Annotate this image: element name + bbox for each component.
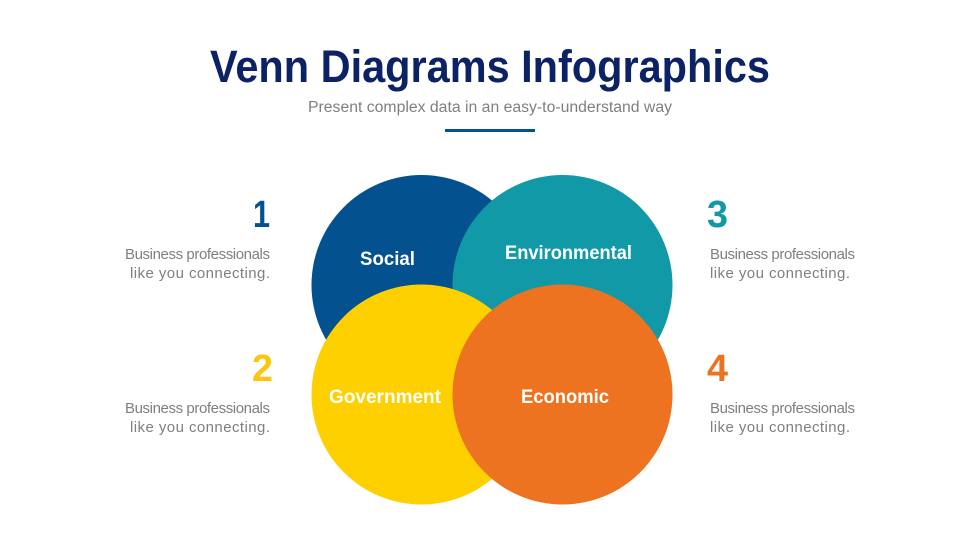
item 2: government	[125, 348, 273, 436]
label: economic: Economic	[521, 387, 609, 408]
item 4: economic	[707, 348, 855, 436]
description 3	[710, 246, 855, 282]
description 1	[125, 246, 270, 282]
item 3: environmental	[707, 194, 855, 282]
label: social: Social	[360, 249, 415, 270]
number 3: 3	[707, 194, 728, 236]
description 4: Business professionals	[710, 400, 855, 417]
description 3: Business professionals	[710, 246, 855, 263]
description 3: like you connecting.	[710, 265, 850, 282]
description 2: like you connecting.	[130, 419, 270, 436]
number 4: 4	[707, 348, 728, 390]
number 2: 2	[252, 348, 273, 390]
circle: social	[312, 175, 532, 395]
description 4: like you connecting.	[710, 419, 850, 436]
venn diagram	[312, 175, 672, 504]
label: environmental: Environmental	[505, 243, 632, 264]
description 1: like you connecting.	[130, 265, 270, 282]
description 2	[125, 400, 270, 436]
description 4	[710, 400, 855, 436]
circle: government	[312, 284, 532, 504]
circle: economic	[452, 284, 672, 504]
label: government: Government	[329, 387, 442, 408]
title: Venn Diagrams Infographics	[210, 41, 770, 92]
description 2: Business professionals	[125, 400, 270, 417]
description 1: Business professionals	[125, 246, 270, 263]
subtitle: Present complex data in an easy-to-understand way	[308, 99, 672, 116]
item 1: social	[125, 194, 270, 282]
title underline	[445, 129, 535, 132]
number 1: 1	[253, 194, 270, 236]
circle: environmental	[452, 175, 672, 395]
